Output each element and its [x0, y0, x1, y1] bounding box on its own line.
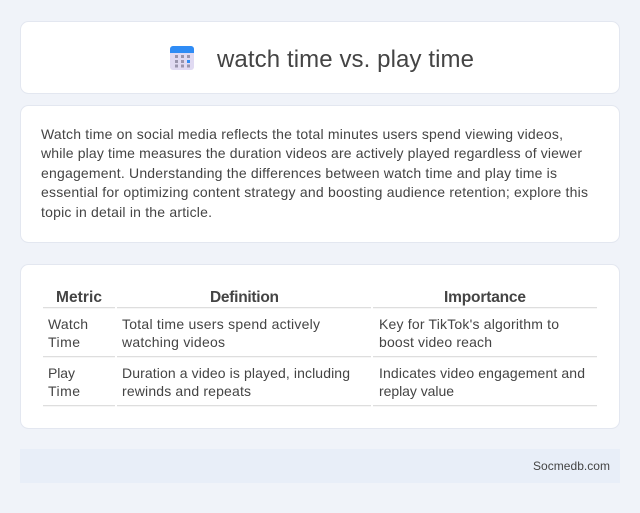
text block: intro: essential for optimizing content strategy and boosting audience retention; explore this	[41, 184, 588, 200]
panel: intro paragraph	[20, 106, 620, 242]
table row: watch time	[48, 316, 559, 350]
table row: play time: rewinds and repeats	[122, 383, 251, 399]
footer	[20, 449, 620, 483]
text block: intro: Watch time on social media reflects the total minutes users spend viewing videos,	[41, 126, 563, 142]
table row: play time: Play	[48, 365, 75, 381]
panel: title card	[20, 22, 620, 94]
footer credit: Socmedb.com	[533, 459, 610, 473]
text block: intro: engagement. Understanding the differences between watch time and play time is	[41, 165, 557, 181]
table row: watch time: Total time users spend actively	[122, 316, 320, 332]
text block: intro	[40, 126, 588, 220]
table row: play time: Indicates video engagement and	[379, 365, 585, 381]
table row: watch time: Key for TikTok's algorithm to	[379, 316, 559, 332]
table row: play time	[48, 365, 585, 399]
table header: Metric	[56, 289, 102, 306]
panel: comparison table	[20, 264, 620, 428]
table row: watch time: Time	[48, 334, 80, 350]
title: watch time vs. play time	[216, 46, 474, 73]
table row: play time: Time	[48, 383, 80, 399]
table header: Definition	[210, 289, 279, 306]
text block: intro: while play time measures the duration videos are actively played regardless of viewer	[40, 145, 582, 161]
table row: watch time: boost video reach	[379, 334, 492, 350]
icon: calendar	[170, 46, 194, 70]
table row: watch time: Watch	[48, 316, 88, 332]
table row: play time: replay value	[379, 383, 454, 399]
table row: play time: Duration a video is played, including	[122, 365, 350, 381]
table row: watch time: watching videos	[121, 334, 225, 350]
text block: intro: topic in detail in the article.	[41, 204, 212, 220]
table header: Importance	[444, 289, 526, 306]
table header	[56, 289, 526, 306]
